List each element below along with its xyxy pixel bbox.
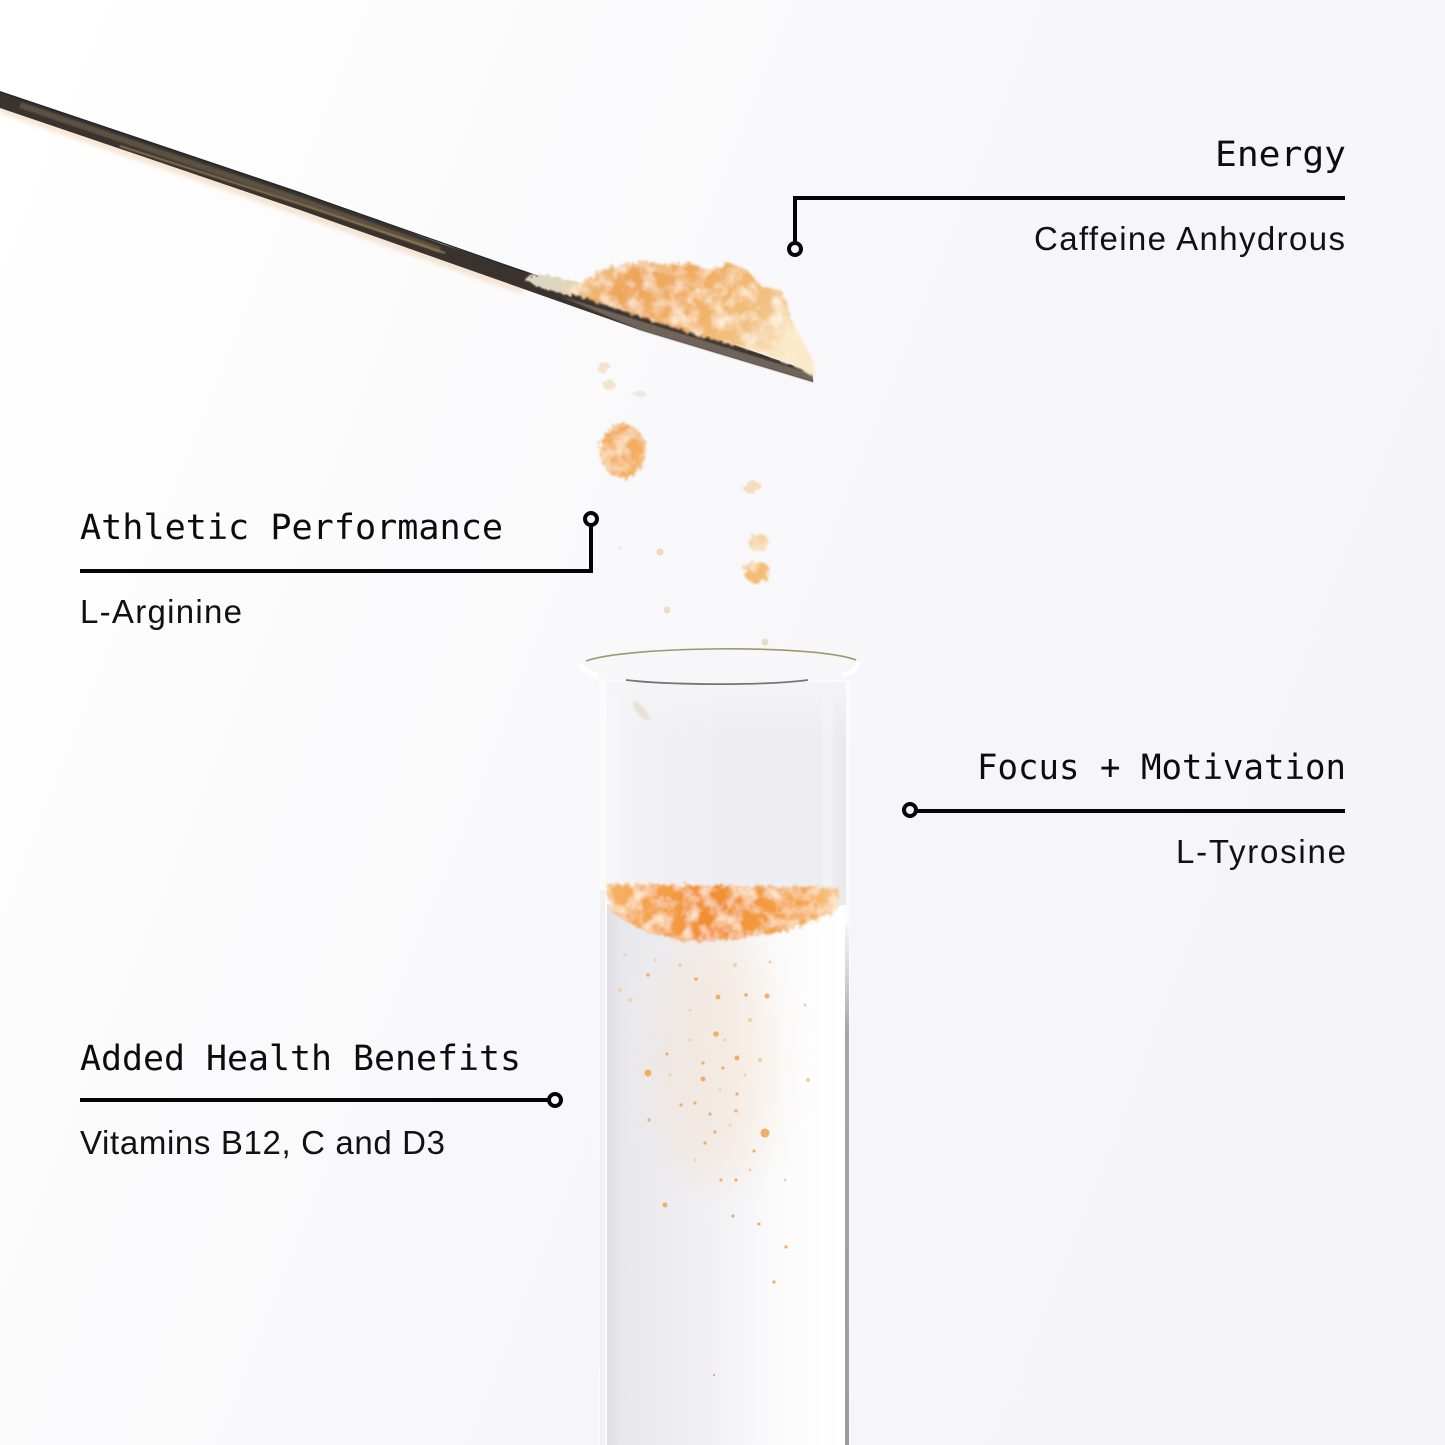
connector: energy bbox=[789, 198, 1345, 255]
connector: athletic performance bbox=[80, 513, 597, 571]
tube rim bbox=[580, 646, 858, 723]
orange powder band bbox=[606, 884, 838, 941]
tube upper air column bbox=[606, 682, 846, 905]
dissolving specks bbox=[644, 973, 788, 1376]
subtext: l-arginine: L-Arginine bbox=[80, 593, 242, 630]
spoon with powder bbox=[0, 91, 815, 382]
spoon top edge bbox=[0, 92, 525, 272]
callout: added health benefits bbox=[80, 1039, 561, 1161]
right glass edge bbox=[845, 925, 849, 1445]
spoon shadow glow bbox=[0, 106, 525, 293]
callout: focus and motivation bbox=[904, 748, 1346, 870]
spoon highlight bbox=[120, 146, 445, 253]
heading: added health benefits: Added Health Benefits bbox=[80, 1039, 521, 1079]
subtext: caffeine: Caffeine Anhydrous bbox=[1034, 220, 1345, 257]
callout: athletic performance bbox=[80, 508, 597, 630]
spoon handle bbox=[0, 91, 813, 382]
tube inner wall lines bbox=[822, 690, 833, 885]
tube glass walls bbox=[599, 680, 850, 1445]
connector: added health benefits bbox=[80, 1094, 561, 1106]
test tube bbox=[580, 646, 858, 1445]
specks haze bbox=[655, 930, 775, 1190]
faint specks bbox=[618, 954, 810, 1182]
heading: athletic performance: Athletic Performance bbox=[80, 508, 503, 548]
water column bbox=[607, 905, 845, 1445]
subtext: vitamins: Vitamins B12, C and D3 bbox=[80, 1124, 445, 1161]
spoon underside blade bbox=[560, 296, 813, 382]
spoon sheen bbox=[20, 105, 440, 250]
powder on spoon bbox=[522, 262, 815, 376]
subtext: l-tyrosine: L-Tyrosine bbox=[1176, 833, 1346, 870]
callout: energy bbox=[789, 135, 1346, 257]
connector: focus and motivation bbox=[904, 804, 1345, 816]
heading: focus and motivation: Focus + Motivation bbox=[977, 748, 1346, 788]
heading: energy: Energy bbox=[1215, 135, 1346, 175]
falling powder bbox=[597, 363, 770, 646]
